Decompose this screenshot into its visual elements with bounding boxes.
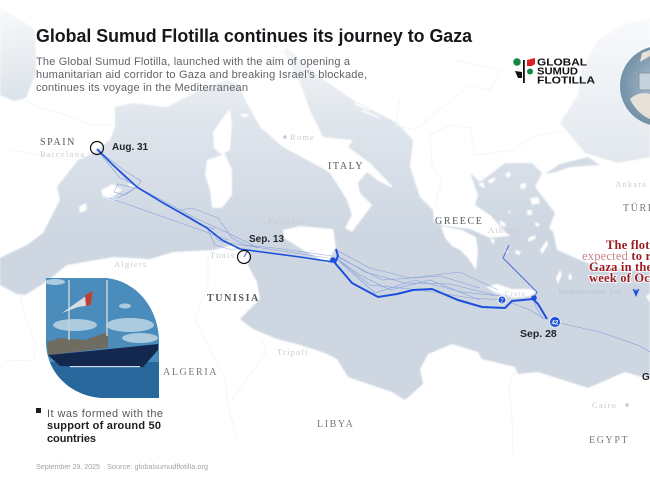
- flag: [62, 291, 93, 313]
- island: Elba: [241, 114, 248, 117]
- logo text: GLOBAL: [537, 58, 587, 68]
- city labels: Athens: [488, 225, 519, 235]
- islets: Dalmatia: [354, 97, 382, 118]
- subtitle: [36, 56, 367, 94]
- city labels: [40, 132, 647, 410]
- note text: support of around 50: [47, 420, 161, 432]
- sea: Atlantic: [0, 8, 36, 101]
- country labels: SPAIN: [40, 137, 76, 148]
- country labels: LIBYA: [317, 419, 354, 430]
- island: Mallorca: [101, 184, 122, 197]
- water: [46, 362, 159, 398]
- masts: [69, 280, 107, 340]
- wake: [70, 366, 140, 367]
- island: Menorca: [128, 183, 137, 187]
- bullet: [36, 408, 41, 413]
- country labels: [40, 137, 650, 446]
- island: Peloponnese: [441, 226, 478, 270]
- island: Sicily: [283, 226, 336, 263]
- arrow: to Gaza: [633, 289, 639, 296]
- country labels: ITALY: [328, 161, 364, 172]
- city labels: Palermo: [268, 216, 305, 226]
- deck: [47, 332, 108, 355]
- thin alternate tracks: [97, 150, 650, 352]
- route stop: Sicily: [330, 257, 336, 263]
- hull: [48, 344, 158, 367]
- globe land: [630, 50, 650, 119]
- city labels: Tunis: [210, 250, 235, 260]
- route stop: current position: [550, 316, 560, 328]
- note text: countries: [47, 433, 96, 445]
- country labels: GREECE: [435, 216, 484, 227]
- route stop: Crete east: [531, 295, 537, 301]
- note text: It was formed with the: [47, 408, 163, 420]
- subtitle: The Global Sumud Flotilla, launched with the aim of opening a: [36, 56, 351, 68]
- logo text: SUMUD: [537, 66, 578, 78]
- date: Sep. 28: Sep. 28: [520, 328, 557, 340]
- island: Cyprus: [646, 293, 650, 303]
- island: Crete: [486, 284, 537, 298]
- sea: Marmara: [545, 157, 600, 174]
- islands: [79, 97, 650, 303]
- footer: date and source: [36, 462, 208, 471]
- island: Corsica: [213, 110, 232, 155]
- date: Sep. 13: Sep. 13: [249, 234, 284, 245]
- sea: Mediterranean: [0, 48, 650, 400]
- route tick: Tunis: [244, 250, 248, 257]
- city labels: Cairo: [592, 400, 617, 410]
- southern track spur: [503, 245, 537, 298]
- country labels: EGYPT: [589, 435, 629, 446]
- logo text: [537, 58, 595, 86]
- logo icon: [513, 58, 535, 83]
- photo: sailing ship: [45, 278, 159, 398]
- country labels: ALGERIA: [163, 367, 218, 378]
- footer: date and source: Source: globalsumudflotilla.org: [107, 462, 208, 471]
- subtitle: continues its voyage in the Mediterranean: [36, 82, 248, 94]
- island: Formentera: [106, 196, 118, 200]
- country labels: TUNISIA: [207, 293, 260, 304]
- label: Mediterranean Sea: Mediterranean Sea: [558, 287, 622, 296]
- subtitle: humanitarian aid corridor to Gaza and breaking Israel’s blockade,: [36, 69, 367, 81]
- note text: [47, 408, 163, 445]
- city dots: [283, 135, 629, 407]
- city labels: Algiers: [114, 259, 147, 269]
- island: Rhodes: [556, 270, 562, 284]
- globe locator: [620, 46, 650, 126]
- route stop: Crete west: [498, 296, 506, 304]
- marker: Sep. 13 circle: [238, 250, 250, 264]
- city labels: Rome: [290, 132, 315, 142]
- route: flotilla tracks: [97, 149, 650, 352]
- logo text: FLOTILLA: [537, 76, 595, 86]
- sky: [46, 278, 159, 398]
- city labels: Ankara: [615, 179, 647, 189]
- footer: date and source: September 29, 2025: [36, 462, 100, 471]
- logo: Global Sumud Flotilla: [513, 58, 595, 86]
- route stop: current position: 42: [552, 320, 559, 326]
- islands: Aegean: [478, 171, 572, 280]
- city labels: Tripoli: [277, 347, 309, 357]
- globe locator box: [639, 73, 650, 90]
- clouds: [45, 279, 158, 343]
- main track: [97, 149, 333, 262]
- island: Sardinia: [205, 154, 232, 208]
- city labels: Crete: [505, 290, 526, 298]
- date: Aug. 31: Aug. 31: [112, 142, 149, 153]
- country borders: [0, 60, 565, 455]
- bullet note: [36, 408, 163, 445]
- route stop: Crete west: 2: [500, 298, 504, 304]
- island: Ibiza: [79, 203, 87, 213]
- callout: expected arrival: [582, 238, 650, 285]
- city labels: Barcelona: [40, 149, 85, 159]
- marker: start circle: [90, 142, 104, 154]
- title: Global Sumud Flotilla continues its journey to Gaza: [36, 25, 473, 46]
- sea: Black Sea: [560, 18, 650, 163]
